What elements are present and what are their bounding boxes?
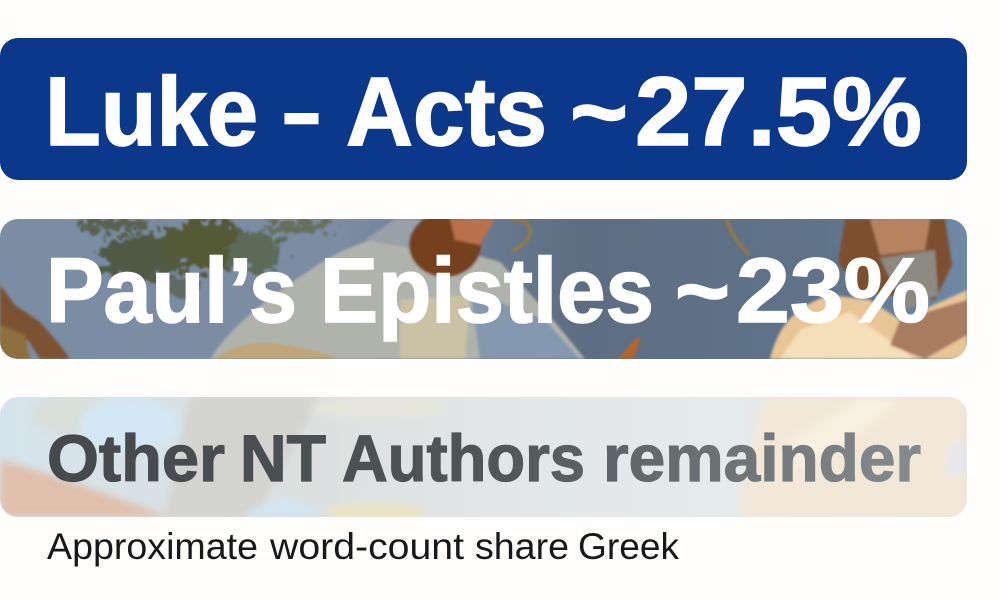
label: Other NT Authors share: NT	[240, 421, 326, 495]
caption: share	[475, 526, 569, 567]
caption: Greek	[578, 526, 679, 567]
panel: Luke-Acts bar	[0, 38, 967, 180]
label: Luke-Acts share: –	[283, 57, 320, 166]
label: Paul's Epistles share: Epistles	[320, 240, 654, 342]
label: Other NT Authors share: remainder	[603, 421, 921, 495]
painting: faded landscape and robed figure	[0, 397, 967, 524]
label: Paul's Epistles share: 23%	[736, 240, 930, 342]
label: Paul's Epistles share: Paul’s	[46, 240, 297, 342]
label: Paul's Epistles share	[46, 240, 930, 342]
label: Other NT Authors share: Authors	[342, 421, 585, 495]
caption: Approximate	[47, 526, 258, 567]
panel: Other NT Authors bar	[0, 397, 967, 524]
label: Luke-Acts share: ~	[570, 57, 628, 166]
painting: two robed figures against a blue sky	[0, 213, 967, 359]
label: Luke-Acts share: 27.5%	[635, 57, 922, 166]
caption: word-count	[269, 526, 465, 567]
label: Luke-Acts share: Acts	[346, 57, 547, 166]
label: Paul's Epistles share: ~	[675, 240, 730, 342]
label: Luke-Acts share	[45, 57, 922, 166]
label: Other NT Authors share	[47, 421, 921, 495]
label: Other NT Authors share: Other	[47, 421, 225, 495]
caption	[47, 526, 679, 567]
label: Luke-Acts share: Luke	[45, 57, 258, 166]
panel: Paul's Epistles bar	[0, 213, 967, 359]
